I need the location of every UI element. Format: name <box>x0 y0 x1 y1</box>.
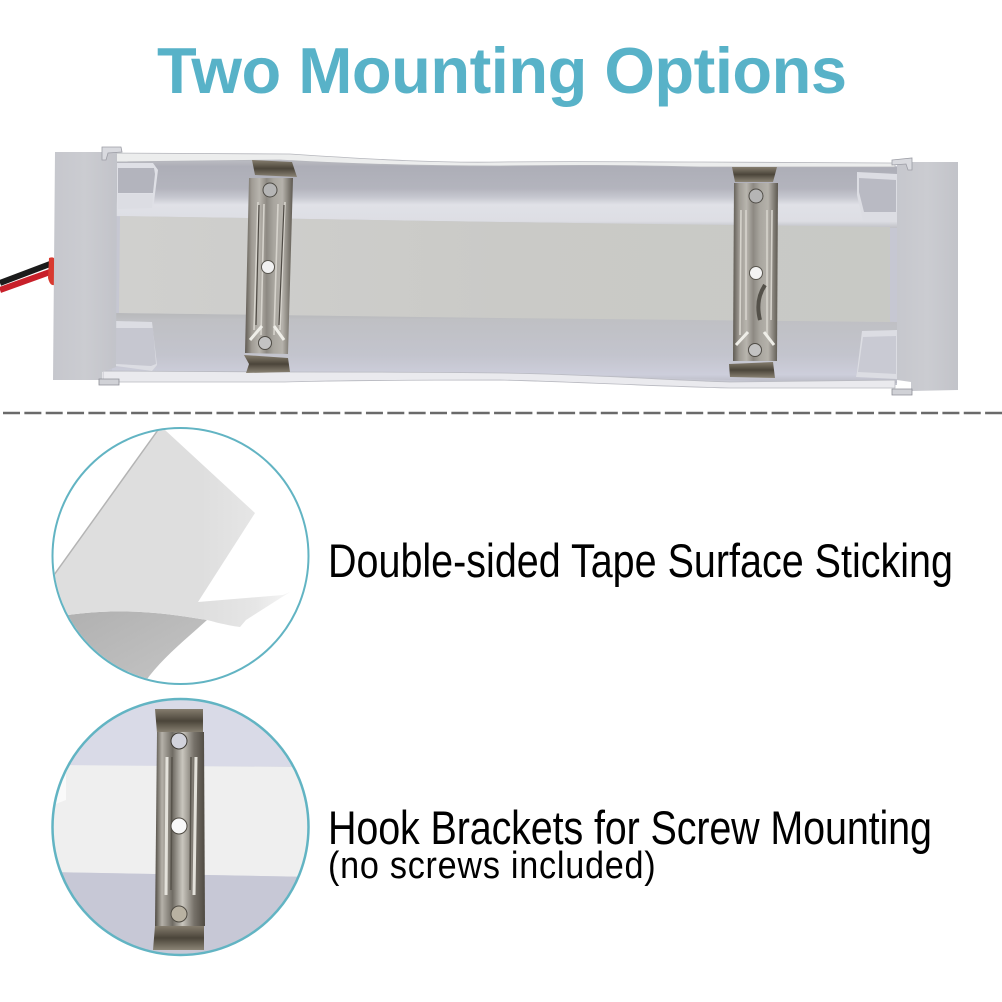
power wires <box>0 257 55 290</box>
bracket caption <box>328 803 932 886</box>
double-sided tape strip <box>119 216 890 322</box>
tape caption: Double-sided Tape Surface Sticking <box>328 536 953 588</box>
title: Two Mounting Options <box>157 34 847 107</box>
left hook bracket <box>244 160 297 373</box>
bracket caption note: (no screws included) <box>328 843 656 886</box>
circle: hook bracket close-up <box>50 696 312 960</box>
bottom rail <box>103 371 895 388</box>
bar body channel <box>105 160 900 385</box>
right end cap <box>892 158 958 395</box>
top rail <box>105 153 895 167</box>
dashed divider <box>3 412 1002 414</box>
left end cap <box>53 147 122 385</box>
circle: double-sided tape close-up <box>50 428 308 690</box>
right hook bracket <box>729 167 778 378</box>
left end inner brackets <box>116 163 158 371</box>
right end inner brackets <box>856 172 897 379</box>
bracket caption main line: Hook Brackets for Screw Mounting <box>328 803 932 855</box>
product photo: LED light bar rear view <box>0 147 958 395</box>
